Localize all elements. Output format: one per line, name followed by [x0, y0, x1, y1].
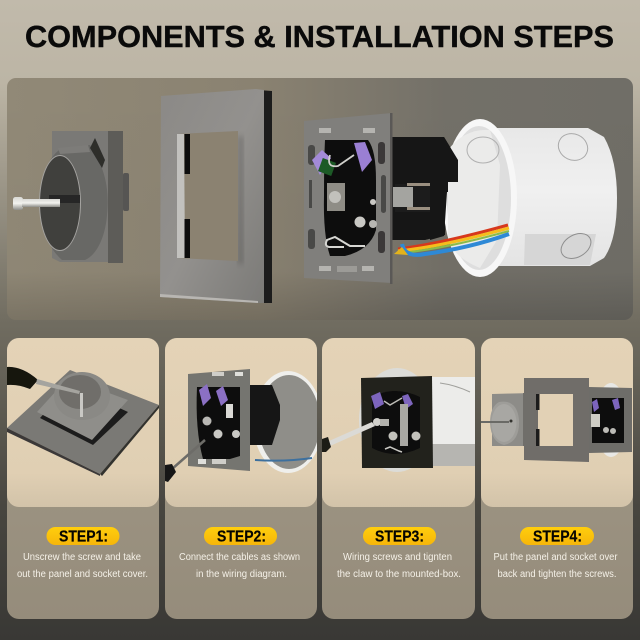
clamp and screws	[327, 183, 345, 211]
badge: STEP2: STEP2:	[217, 529, 266, 546]
illustration: refitting panel and socket	[481, 378, 632, 462]
illustration: connecting cables	[165, 369, 323, 482]
component: front panel frame	[160, 89, 272, 303]
socket body overlap	[430, 137, 458, 240]
text: step 4 instructions: Put the panel and socket over	[494, 552, 618, 563]
card: step 4	[481, 338, 633, 619]
text: step 3 instructions: the claw to the mounted-box.	[337, 569, 461, 580]
text: step 1 instructions: Unscrew the screw and take	[23, 552, 141, 563]
badge: STEP2	[204, 527, 277, 546]
socket rear body	[391, 137, 458, 240]
badge: STEP1: STEP1:	[59, 529, 108, 546]
card: step 1	[7, 338, 159, 619]
badge: STEP4	[520, 527, 594, 546]
mounting plate	[304, 113, 392, 283]
title: COMPONENTS & INSTALLATION STEPS	[25, 20, 614, 54]
text: step 2 instructions	[179, 552, 300, 580]
illustration: removing socket cover	[7, 367, 159, 476]
text: step 2 instructions: in the wiring diagram.	[196, 569, 287, 580]
component: white mounting box	[394, 119, 617, 277]
text: step 1 instructions: out the panel and socket cover.	[17, 569, 148, 580]
text: step 1 instructions	[17, 552, 148, 580]
rainbow cable	[398, 225, 508, 249]
card: step 3	[322, 338, 475, 619]
badge: STEP3	[363, 527, 436, 546]
card: step 2	[165, 338, 323, 619]
text: step 4 instructions: back and tighten the screws.	[498, 569, 616, 580]
text: step 2 instructions: Connect the cables as shown	[179, 552, 300, 563]
text: step 3 instructions: Wiring screws and tignten	[343, 552, 452, 563]
fixing slots	[308, 145, 315, 165]
badge: STEP1	[46, 527, 120, 546]
badge: STEP3: STEP3:	[375, 529, 424, 546]
panel: components	[7, 78, 633, 320]
text: step 4 instructions	[494, 552, 618, 580]
component: socket module with wires	[304, 113, 458, 284]
illustration: tightening the claw	[322, 368, 475, 472]
badge: STEP4: STEP4:	[533, 529, 582, 546]
component: socket cover with screw	[13, 131, 129, 263]
text: step 3 instructions	[337, 552, 461, 580]
terminals	[312, 150, 331, 175]
